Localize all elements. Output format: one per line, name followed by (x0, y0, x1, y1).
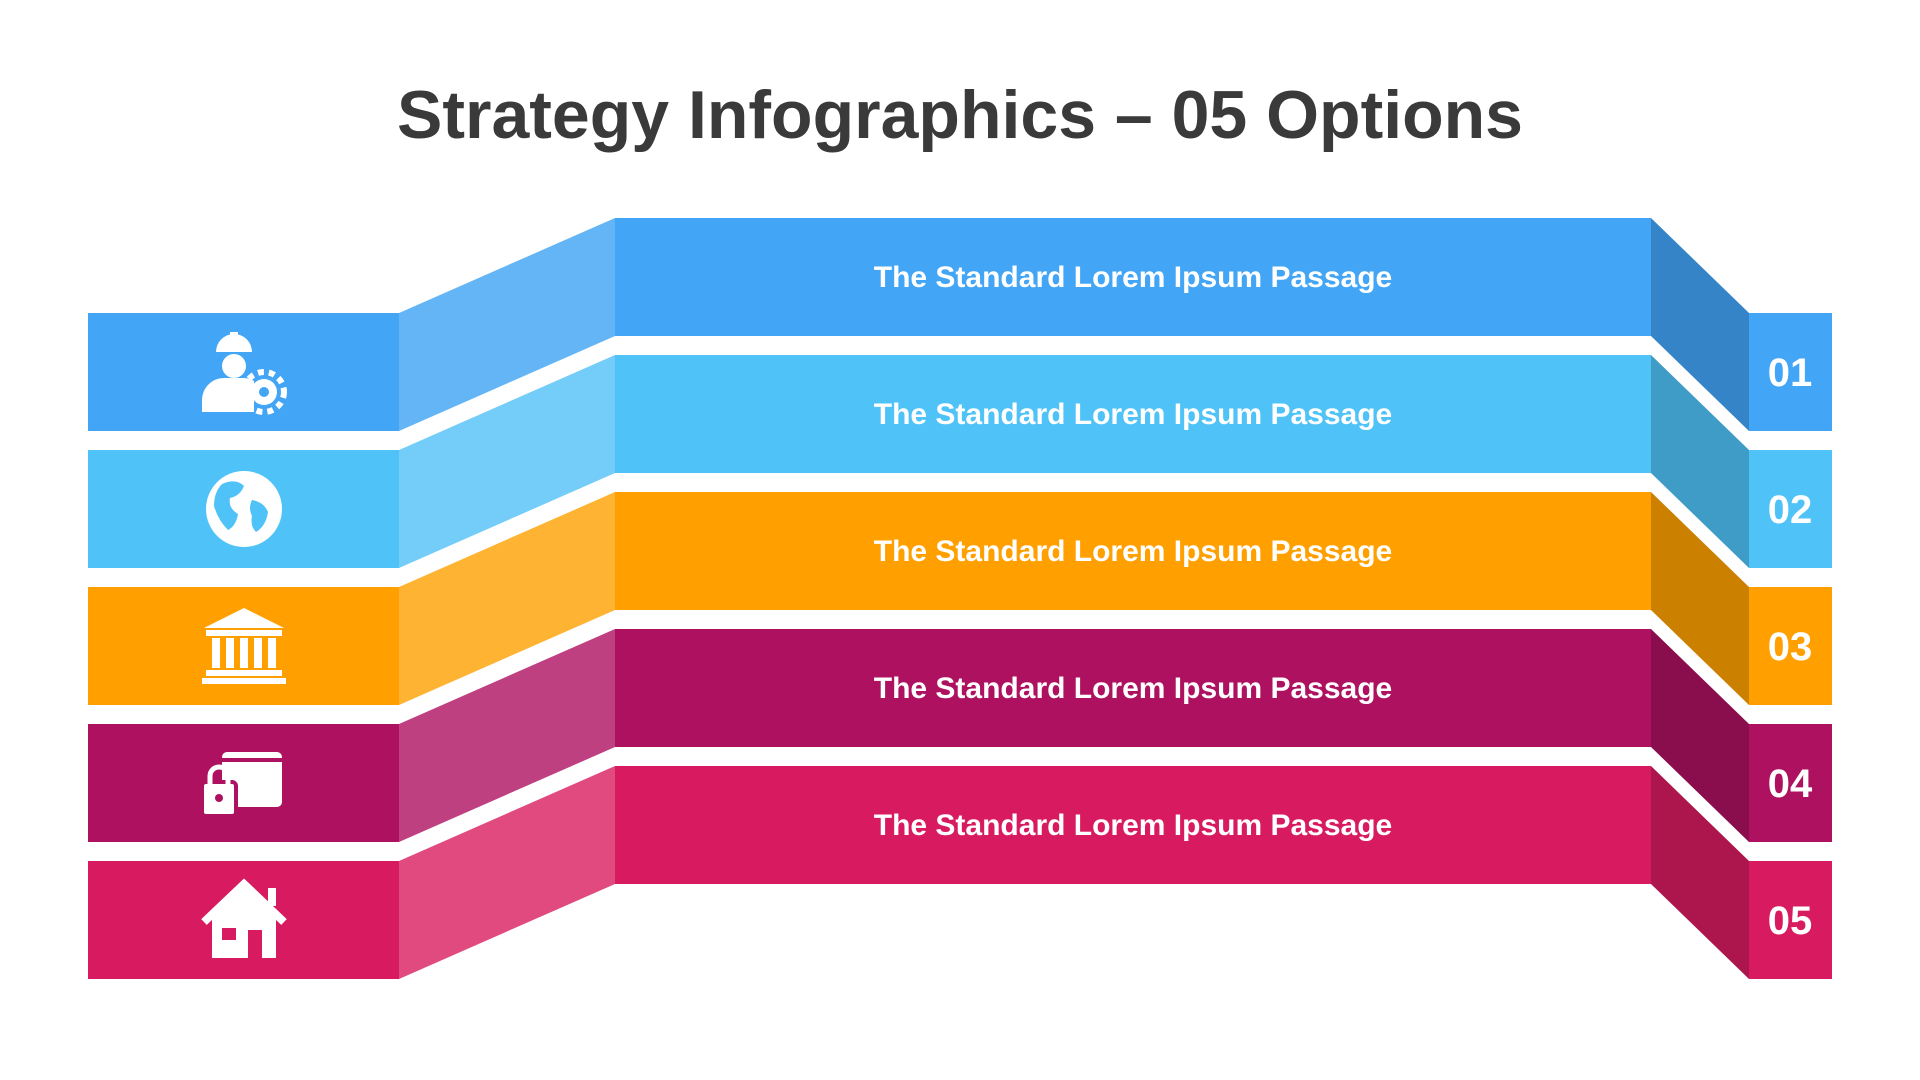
row 02: The Standard Lorem Ipsum Passage (874, 398, 1392, 431)
row 02 (88, 355, 1832, 568)
title: Strategy Infographics – 05 Options (397, 77, 1523, 153)
row 04: The Standard Lorem Ipsum Passage (874, 672, 1392, 705)
row 01 (88, 218, 1832, 431)
row 05 (88, 766, 1832, 979)
row 03: The Standard Lorem Ipsum Passage (874, 535, 1392, 568)
row 01: 01 (1768, 351, 1812, 395)
row 03 (88, 492, 1832, 705)
icon: engineer with gear (202, 332, 284, 412)
row 05: The Standard Lorem Ipsum Passage (874, 809, 1392, 842)
icon: globe (206, 471, 282, 547)
row 01: The Standard Lorem Ipsum Passage (874, 261, 1392, 294)
icon: bank building (202, 608, 286, 684)
icon: house (204, 884, 284, 958)
row 03: 03 (1768, 625, 1812, 669)
row 05: 05 (1768, 899, 1812, 943)
row 04 (88, 629, 1832, 842)
icon: locked box (202, 752, 282, 816)
row 04: 04 (1768, 762, 1813, 806)
row 02: 02 (1768, 488, 1812, 532)
